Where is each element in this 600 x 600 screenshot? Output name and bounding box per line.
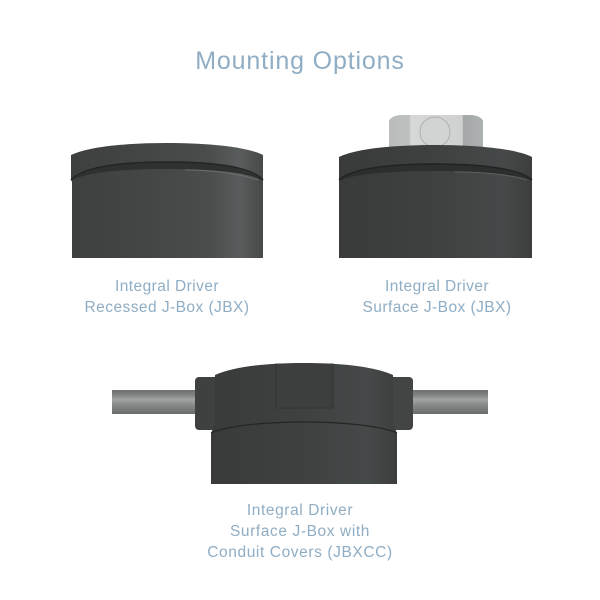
conduit cover: right <box>387 377 413 430</box>
fixture: recessed J-box <box>71 143 263 258</box>
caption: recessed J-box: Recessed J-Box (JBX) <box>85 299 249 316</box>
caption: surface J-box with conduit covers: Integral Driver <box>247 502 353 519</box>
caption: surface J-box <box>363 278 511 316</box>
conduit cover: left <box>195 377 221 430</box>
caption: surface J-box with conduit covers: Surface J-Box with <box>230 523 370 540</box>
caption: recessed J-box <box>85 278 249 316</box>
conduit: left pipe <box>112 390 198 414</box>
caption: surface J-box with conduit covers: Conduit Covers (JBXCC) <box>207 544 393 561</box>
caption: surface J-box: Surface J-Box (JBX) <box>363 299 511 316</box>
caption: surface J-box with conduit covers <box>207 502 393 561</box>
conduit: right pipe <box>410 390 488 414</box>
icon: hex nut <box>389 115 483 150</box>
fixture: surface J-box with nut <box>339 115 532 258</box>
title: Mounting Options <box>195 47 405 75</box>
caption: recessed J-box: Integral Driver <box>115 278 219 295</box>
caption: surface J-box: Integral Driver <box>385 278 489 295</box>
fixture: surface J-box with conduit covers <box>112 363 488 484</box>
